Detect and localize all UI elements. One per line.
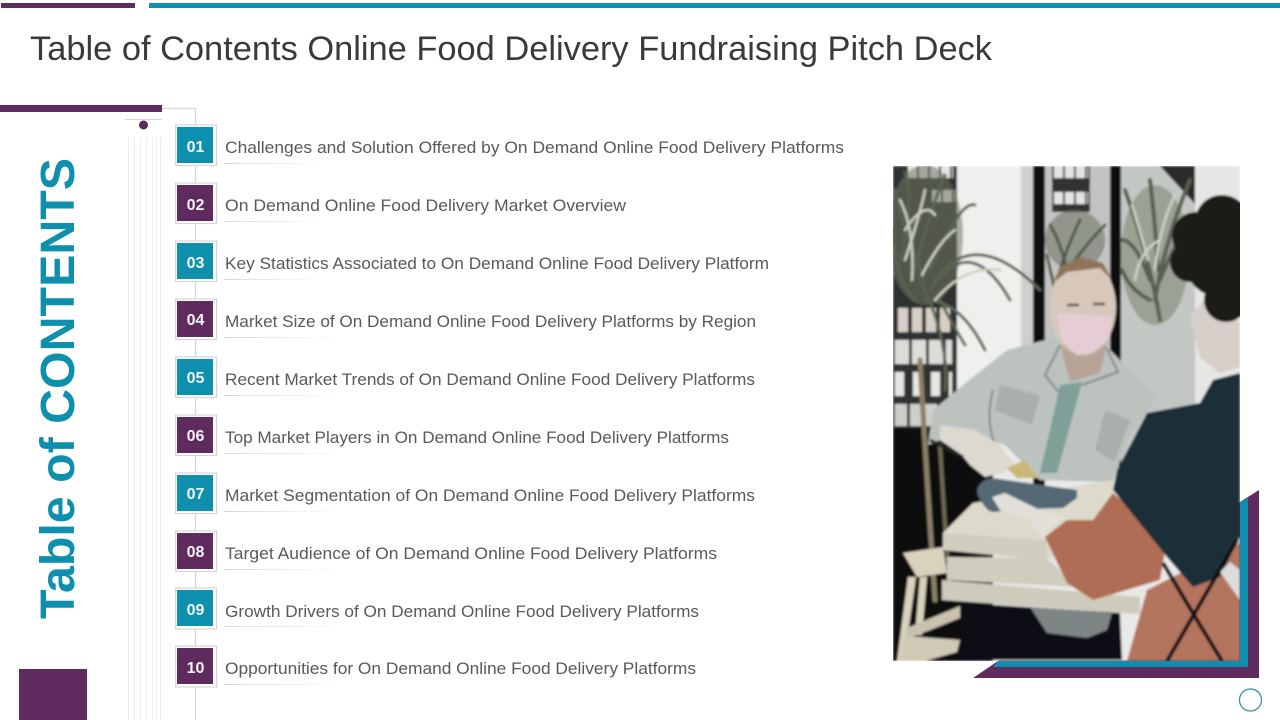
item 10: Opportunities for On Demand Online Food Delivery Platforms (225, 659, 696, 678)
item 06 (176, 415, 729, 456)
stool (903, 547, 947, 577)
item 01: Challenges and Solution Offered by On Demand Online Food Delivery Platforms (225, 138, 844, 157)
photo: delivery person handing pizza boxes to masked customer (887, 165, 1255, 661)
item 09: 09 (187, 602, 204, 619)
item 07 (176, 473, 755, 514)
item 07: 07 (187, 486, 204, 503)
plant foliage (887, 165, 963, 305)
item 06: 06 (187, 428, 204, 445)
item 06: Top Market Players in On Demand Online Food Delivery Platforms (225, 428, 729, 447)
delivery person (1127, 543, 1240, 661)
item 04: 04 (187, 312, 204, 329)
contents list (176, 125, 844, 687)
item 10 (176, 646, 696, 687)
photo frame: purple and teal corner shapes (973, 490, 1259, 678)
item 01: 01 (187, 139, 204, 156)
page circle marker (1240, 689, 1262, 711)
item 03: 03 (187, 255, 204, 272)
item 02: On Demand Online Food Delivery Market Overview (225, 196, 627, 215)
item 04: Market Size of On Demand Online Food Delivery Platforms by Region (225, 312, 756, 331)
item 08: Target Audience of On Demand Online Food Delivery Platforms (225, 544, 717, 563)
item 05: 05 (187, 370, 204, 387)
item 09: Growth Drivers of On Demand Online Food Delivery Platforms (225, 602, 699, 621)
vertical heading: Table of CONTENTS (32, 158, 85, 619)
item 05 (176, 357, 755, 398)
title: Table of Contents Online Food Delivery Fundraising Pitch Deck (30, 30, 993, 68)
left decoration: bar, dot, stripes and timeline line (0, 105, 196, 720)
item 05: Recent Market Trends of On Demand Online Food Delivery Platforms (225, 370, 755, 389)
item 03: Key Statistics Associated to On Demand Online Food Delivery Platform (225, 254, 769, 273)
item 02: 02 (187, 197, 204, 214)
customer (926, 338, 1122, 483)
item 08: 08 (187, 544, 204, 561)
purple corner square (19, 669, 87, 720)
item 10: 10 (187, 660, 204, 677)
pizza boxes (942, 580, 1140, 614)
dark lower background (893, 428, 993, 661)
item 01 (176, 125, 844, 166)
item 08 (176, 531, 717, 572)
item 02 (176, 183, 627, 224)
top accent bars (1, 3, 1280, 8)
item 04 (176, 299, 756, 340)
item 03 (176, 241, 769, 282)
item 07: Market Segmentation of On Demand Online Food Delivery Platforms (225, 486, 755, 505)
gloves and card terminal (940, 425, 1015, 477)
item 09 (176, 588, 699, 629)
